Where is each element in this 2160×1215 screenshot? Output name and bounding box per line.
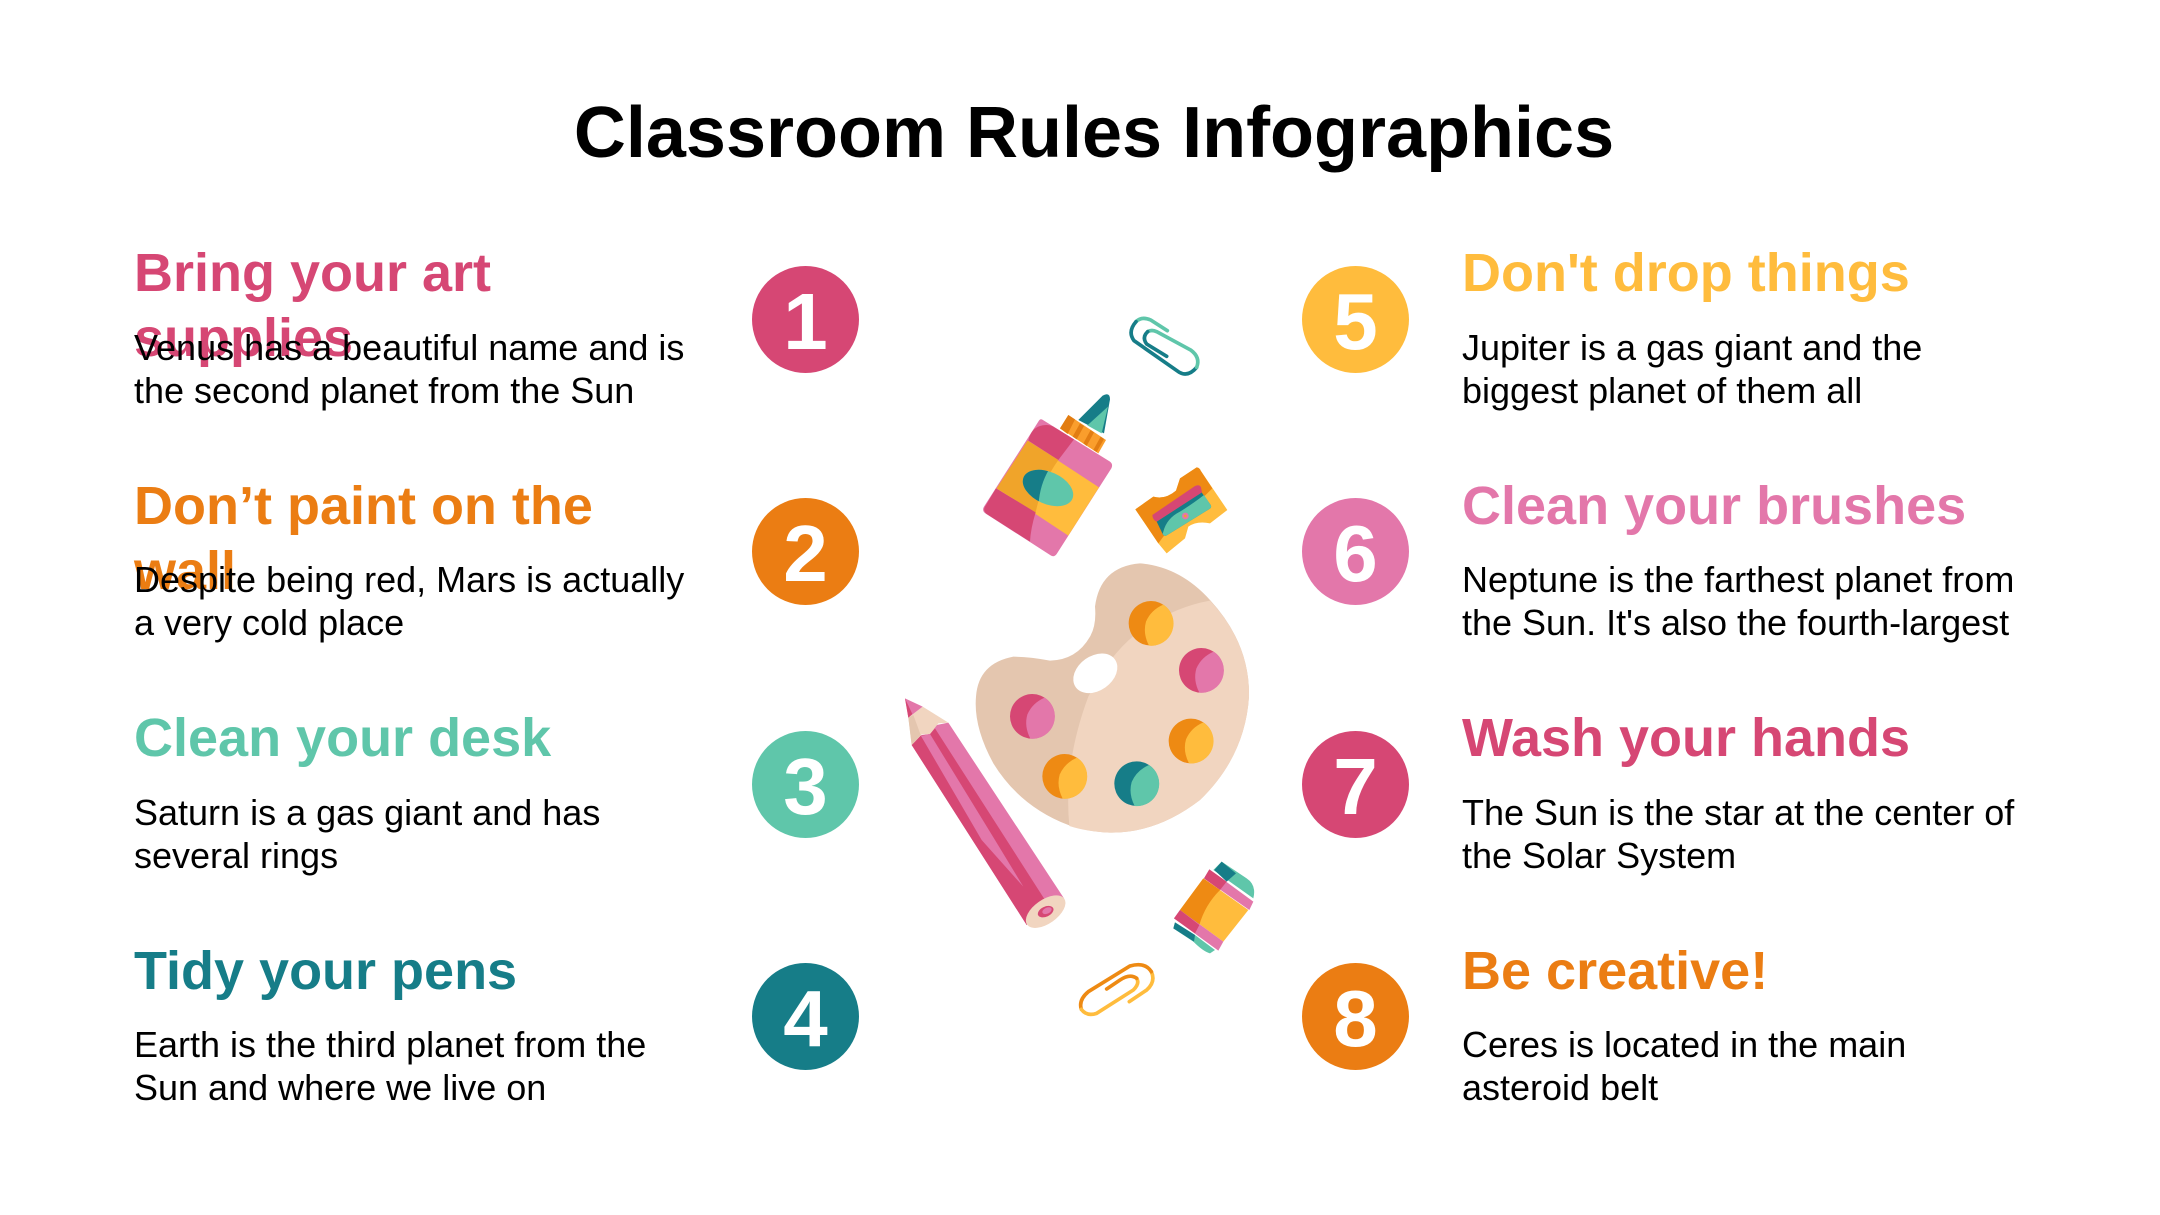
rule 1 description: Venus has a beautiful name and is bbox=[134, 326, 684, 368]
rule 7 text bbox=[1462, 708, 2014, 876]
rule 3 description: several rings bbox=[134, 835, 338, 876]
icon: pink pencil bbox=[905, 698, 1071, 934]
number badge 5 bbox=[1302, 266, 1409, 372]
rule 1 heading: Bring your art bbox=[134, 243, 491, 303]
rule 5 description bbox=[1462, 326, 1922, 411]
paint dab: orange bottom bbox=[1042, 754, 1087, 799]
rule 3 text bbox=[134, 708, 600, 876]
rule 3 description: Saturn is a gas giant and has bbox=[134, 792, 600, 832]
number badge 1: 1 bbox=[783, 276, 828, 366]
rule 2 description bbox=[134, 559, 684, 643]
rule 3 description bbox=[134, 792, 600, 876]
rule 5 description: biggest planet of them all bbox=[1462, 370, 1862, 411]
rule 6 heading: Clean your brushes bbox=[1462, 476, 1966, 536]
number badge 8: 8 bbox=[1333, 974, 1378, 1063]
icon: eraser bbox=[1173, 862, 1254, 953]
rule 2 heading: wall bbox=[134, 540, 236, 600]
rule 2 heading bbox=[134, 476, 593, 600]
rule 2 heading: Don’t paint on the bbox=[134, 476, 593, 536]
rule 4 description: Sun and where we live on bbox=[134, 1067, 546, 1108]
number badge 6: 6 bbox=[1333, 509, 1378, 598]
rule 7 description bbox=[1462, 792, 2014, 876]
rule 6 description: Neptune is the farthest planet from bbox=[1462, 559, 2014, 600]
number badge 8 bbox=[1302, 963, 1409, 1070]
central art supplies illustration bbox=[905, 316, 1254, 1016]
number badge 7: 7 bbox=[1333, 742, 1378, 830]
rule 5 heading: Don't drop things bbox=[1462, 243, 1910, 303]
number badge 3: 3 bbox=[783, 742, 828, 830]
rule 1 heading: supplies bbox=[134, 308, 353, 368]
number badge 6 bbox=[1302, 498, 1409, 605]
rule 1 text bbox=[134, 243, 684, 411]
icon: orange paperclip bbox=[1081, 965, 1153, 1014]
rule 8 description bbox=[1462, 1024, 1906, 1108]
rule 1 heading bbox=[134, 243, 491, 368]
rule 5 text bbox=[1462, 243, 1922, 411]
rule 3 heading: Clean your desk bbox=[134, 708, 551, 768]
rule 4 heading: Tidy your pens bbox=[134, 940, 517, 1000]
rule 4 text bbox=[134, 940, 646, 1108]
number badge 4 bbox=[752, 963, 859, 1070]
paint dab: teal bottom bbox=[1114, 761, 1159, 806]
rule 1 description: the second planet from the Sun bbox=[134, 370, 634, 411]
rule 6 description: the Sun. It's also the fourth-largest bbox=[1462, 602, 2009, 643]
icon: pencil sharpener bbox=[1135, 467, 1227, 553]
paint dab: pink right bbox=[1179, 648, 1224, 693]
rule 7 description: the Solar System bbox=[1462, 835, 1736, 876]
number badge 1 bbox=[752, 266, 859, 372]
rule 8 description: asteroid belt bbox=[1462, 1067, 1658, 1108]
number badge 3 bbox=[752, 730, 859, 838]
number badge 5: 5 bbox=[1333, 276, 1378, 366]
rule 8 text bbox=[1462, 940, 1906, 1108]
icon: paint palette bbox=[976, 563, 1249, 833]
icon: teal paperclip bbox=[1131, 318, 1198, 374]
number badge 4: 4 bbox=[783, 974, 828, 1063]
rule 8 heading: Be creative! bbox=[1462, 940, 1768, 1000]
rule 7 description: The Sun is the star at the center of bbox=[1462, 792, 2014, 832]
rule 4 description: Earth is the third planet from the bbox=[134, 1024, 646, 1065]
number badge 7 bbox=[1302, 730, 1409, 838]
title: Classroom Rules Infographics bbox=[574, 93, 1614, 173]
number badge 2: 2 bbox=[783, 509, 828, 598]
rule 8 description: Ceres is located in the main bbox=[1462, 1024, 1906, 1065]
rule 7 heading: Wash your hands bbox=[1462, 708, 1910, 768]
rule 1 description bbox=[134, 326, 684, 411]
rule 2 description: Despite being red, Mars is actually bbox=[134, 559, 684, 600]
rule 5 description: Jupiter is a gas giant and the bbox=[1462, 326, 1922, 368]
rule 6 description bbox=[1462, 559, 2014, 643]
rule 2 text bbox=[134, 476, 684, 643]
rule 4 description bbox=[134, 1024, 646, 1108]
icon: glue bottle bbox=[983, 394, 1112, 556]
paint dab: pink left bbox=[1010, 694, 1055, 739]
rule 2 description: a very cold place bbox=[134, 602, 404, 643]
paint dab: orange top bbox=[1129, 601, 1174, 646]
paint dab: orange right bbox=[1169, 719, 1214, 763]
number badge 2 bbox=[752, 498, 859, 605]
rule 6 text bbox=[1462, 476, 2014, 643]
